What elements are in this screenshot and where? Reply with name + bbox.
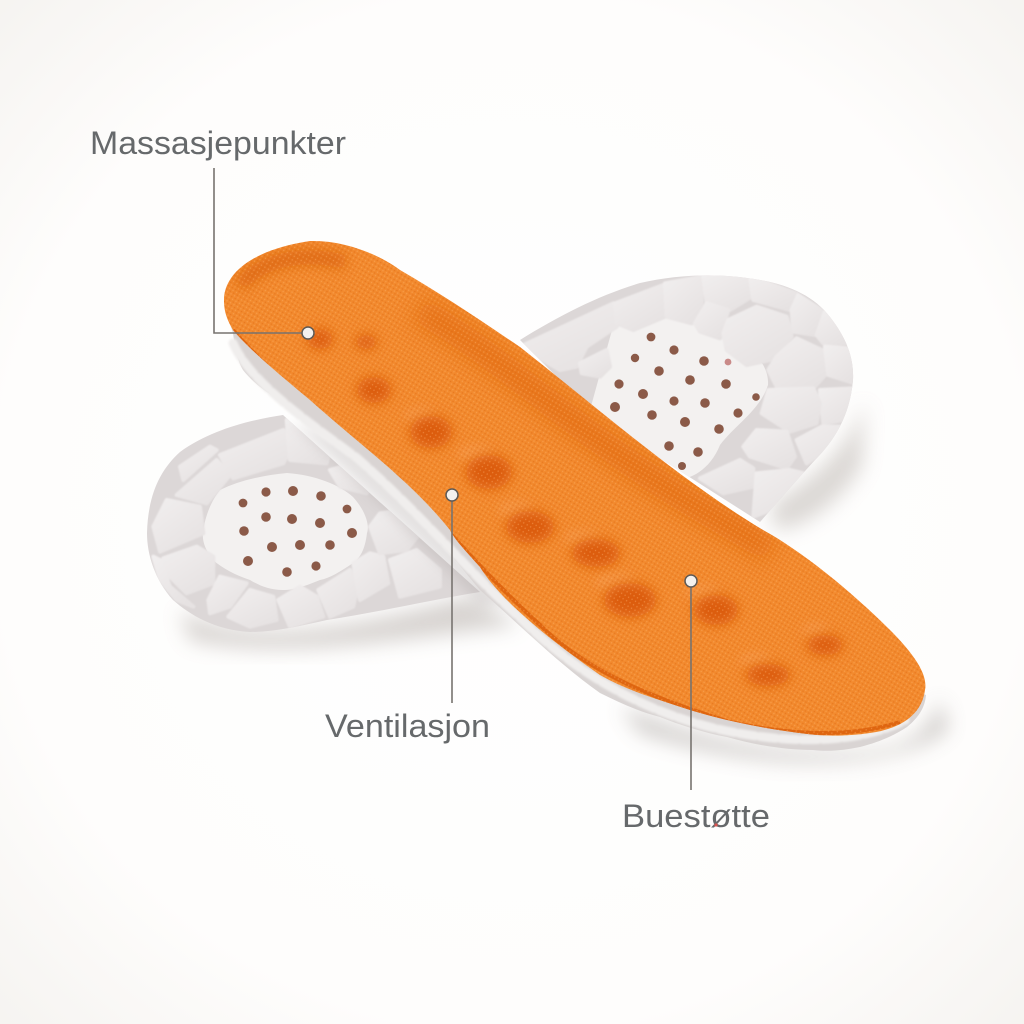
perforated centre [203,473,368,590]
perforation holes [610,333,760,470]
perforated centre [590,316,768,480]
perforation holes [239,486,357,577]
marker: Massasjepunkter [302,327,314,339]
insole: front, orange top fabric [224,241,926,736]
leader line: Massasjepunkter [214,168,302,333]
label: Buestøtte: Buestøtte [622,798,770,834]
foam cells [153,413,440,627]
callout: Massasjepunkter [90,125,346,339]
label: Massasjepunkter: Massasjepunkter [90,125,346,161]
callout: Buestøtte [622,575,770,834]
shadow of front insole on back insoles [290,420,530,605]
fabric texture [224,241,926,736]
red speck under label [714,823,718,827]
foam cells [520,275,855,517]
insole: back right, underside [520,275,855,522]
label: Ventilasjon: Ventilasjon [325,708,490,744]
marker: Ventilasjon [446,489,458,501]
massage points [307,329,843,686]
insole: back left, underside [147,413,480,632]
leader line: Buestøtte [690,587,692,790]
bump highlights [404,407,829,667]
insole: front, white foam base [224,305,926,751]
leader line: Ventilasjon [451,501,453,703]
marker: Buestøtte [685,575,697,587]
soft shadows [180,400,948,762]
heel cup and arch shading [240,257,345,285]
callout: Ventilasjon [325,489,490,744]
